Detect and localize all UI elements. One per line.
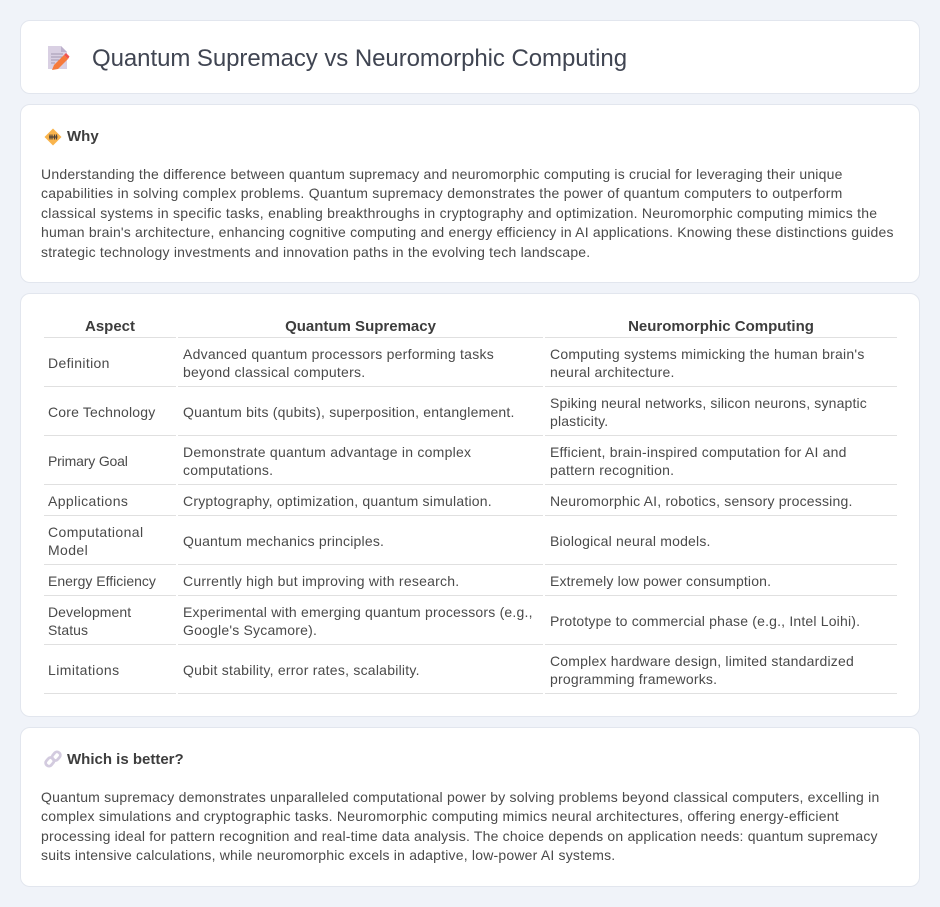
row: development status: Development <box>48 604 131 620</box>
text: which is better paragraph: Quantum supremacy demonstrates unparalleled computational power by solving problems beyond classical computers, excelling in <box>41 789 879 805</box>
text: why paragraph <box>41 166 894 260</box>
icon: link <box>44 750 62 768</box>
panel: why <box>20 104 920 283</box>
row: core technology: Quantum bits (qubits), superposition, entanglement. <box>183 404 515 420</box>
row: primary goal: Demonstrate quantum advantage in complex <box>183 444 471 460</box>
row: energy efficiency: Extremely low power consumption. <box>550 573 771 589</box>
title: Quantum Supremacy vs Neuromorphic Computing <box>92 45 627 72</box>
row: definition: neural architecture. <box>550 364 675 380</box>
row: primary goal: computations. <box>183 462 273 478</box>
table header <box>44 318 897 338</box>
row: development status: Experimental with emerging quantum processors (e.g., <box>183 604 533 620</box>
row: computational model: Quantum mechanics principles. <box>183 533 384 549</box>
table header: Neuromorphic Computing <box>628 318 814 335</box>
row: computational model: Computational <box>48 524 143 540</box>
row: core technology: Core Technology <box>48 404 155 420</box>
row: definition: Advanced quantum processors performing tasks <box>183 346 494 362</box>
row: limitations <box>44 653 897 694</box>
text: why paragraph: capabilities in solving complex problems. Quantum supremacy demonstrates the power of quantum computers to outperform <box>41 185 843 201</box>
heading: why: Why <box>67 128 99 145</box>
text: why paragraph: classical systems in specific tasks, enabling breakthroughs in cryptography and optimization. Neuromorphic computing mimics the <box>41 205 877 221</box>
row: computational model: Biological neural models. <box>550 533 711 549</box>
panel: comparison table <box>20 293 920 717</box>
row: core technology: plasticity. <box>550 413 608 429</box>
table header: Aspect <box>85 318 135 335</box>
text: why paragraph: strategic technology investments and innovation paths in the evolving tech landscape. <box>41 244 590 260</box>
heading: which is better: Which is better? <box>67 751 184 768</box>
row: core technology <box>44 395 897 436</box>
row: computational model: Model <box>48 542 88 558</box>
panel: header <box>20 20 920 94</box>
row: energy efficiency: Energy Efficiency <box>48 573 156 589</box>
text: which is better paragraph <box>41 789 879 863</box>
row: primary goal <box>44 444 897 485</box>
table header: Quantum Supremacy <box>285 318 436 335</box>
text: which is better paragraph: complex simulations and cryptographic tasks. Neuromorphic computing mimics neural architectures, offering energy-efficient <box>41 808 839 824</box>
row: energy efficiency <box>44 573 897 596</box>
text: why paragraph: Understanding the difference between quantum supremacy and neuromorphic computing is crucial for leveraging their unique <box>41 166 843 182</box>
row: applications: Applications <box>48 493 128 509</box>
row: development status <box>44 604 897 645</box>
row: definition: beyond classical computers. <box>183 364 365 380</box>
row: definition: Definition <box>48 355 110 371</box>
text: which is better paragraph: processing ideal for pattern recognition and real-time data analysis. The choice depends on application needs: quantum supremacy <box>41 828 878 844</box>
icon: warning diamond <box>44 128 62 146</box>
row: applications: Neuromorphic AI, robotics, sensory processing. <box>550 493 853 509</box>
text: which is better paragraph: suits intensive calculations, while neuromorphic excels in adaptive, low-power AI systems. <box>41 847 615 863</box>
row: development status: Status <box>48 622 88 638</box>
row: primary goal: Efficient, brain-inspired computation for AI and <box>550 444 847 460</box>
icon: document with pencil <box>48 46 70 70</box>
row: limitations: Limitations <box>48 662 120 678</box>
row: primary goal: Primary Goal <box>48 453 128 469</box>
panel: which is better <box>20 727 920 887</box>
row: energy efficiency: Currently high but improving with research. <box>183 573 459 589</box>
row: computational model <box>44 524 897 565</box>
text: why paragraph: human brain's architecture, enhancing cognitive computing and energy efficiency in AI applications. Knowing these distinctions guides <box>41 224 894 240</box>
row: definition: Computing systems mimicking the human brain's <box>550 346 865 362</box>
row: primary goal: pattern recognition. <box>550 462 674 478</box>
row: limitations: Complex hardware design, limited standardized <box>550 653 854 669</box>
row: applications <box>44 493 897 516</box>
row: core technology: Spiking neural networks, silicon neurons, synaptic <box>550 395 867 411</box>
row: development status: Google's Sycamore). <box>183 622 317 638</box>
row: applications: Cryptography, optimization, quantum simulation. <box>183 493 492 509</box>
row: limitations: programming frameworks. <box>550 671 717 687</box>
row: limitations: Qubit stability, error rates, scalability. <box>183 662 420 678</box>
row: development status: Prototype to commercial phase (e.g., Intel Loihi). <box>550 613 860 629</box>
row: definition <box>44 346 897 387</box>
